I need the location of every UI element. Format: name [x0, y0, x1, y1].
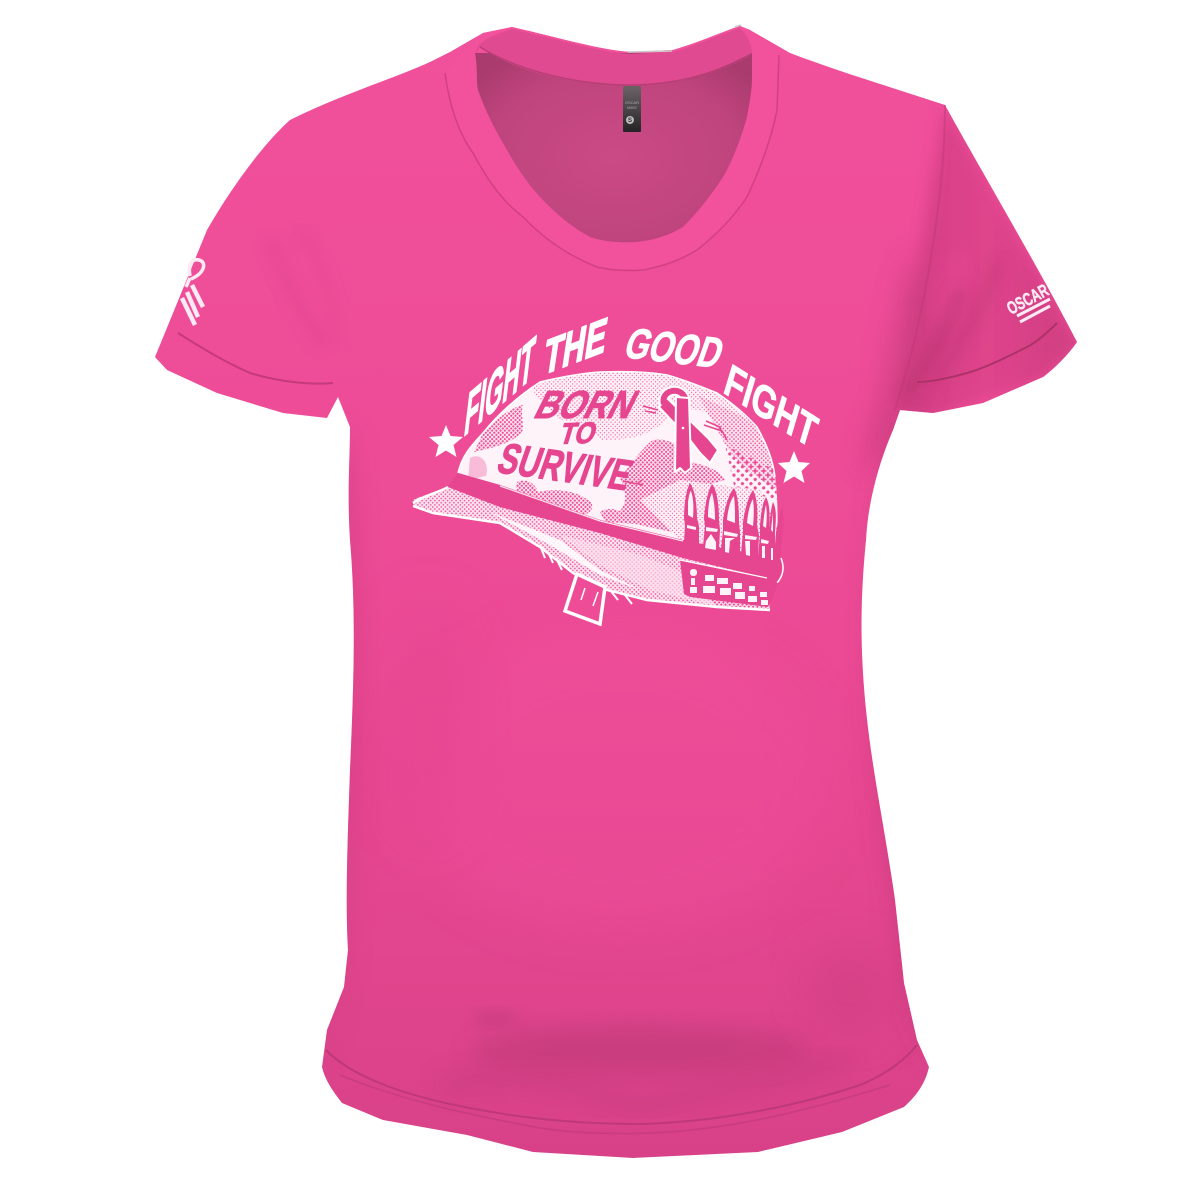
slogan: FIGHT THE GOOD FIGHT: THE — [540, 307, 611, 387]
fabric shading folds — [270, 105, 1080, 1105]
brim edge — [413, 487, 770, 610]
slogan: FIGHT THE GOOD FIGHT: FIGHT — [461, 324, 538, 451]
neck label tag: S — [628, 118, 632, 124]
bullets — [684, 483, 784, 562]
helmet scratches — [623, 406, 727, 485]
helmet band — [448, 473, 782, 583]
neck label tag: OSCAR — [625, 100, 639, 105]
product illustration: pink t-shirt — [155, 24, 1077, 1158]
left camo patches — [474, 405, 523, 452]
slogan: FIGHT THE GOOD FIGHT: GOOD — [619, 320, 730, 378]
pink ribbon — [659, 391, 718, 473]
neck label tag — [623, 86, 641, 132]
collar and neck opening — [445, 25, 779, 271]
collar seam — [445, 55, 779, 271]
top halftone camo — [534, 372, 749, 440]
collar rib — [445, 26, 779, 271]
helmet brim underside — [413, 487, 770, 609]
slogan: FIGHT THE GOOD FIGHT: FIGHT — [719, 355, 823, 458]
central camo patch — [620, 440, 725, 532]
right sleeve logo: OSCAR: OSCAR — [1004, 281, 1052, 319]
inner back neck — [475, 53, 752, 242]
helmet graffiti: BORN TO SURVIVE: TO — [556, 417, 601, 451]
left sleeve logo: ribbon with stripes — [182, 260, 204, 325]
t-shirt body — [155, 26, 1080, 1158]
lower camo patches — [516, 480, 592, 516]
chest graphic: helmet — [410, 307, 823, 624]
neck label tag: MIKE — [627, 105, 637, 110]
right halftone camo — [698, 395, 778, 490]
helmet graffiti: BORN TO SURVIVE: SURVIVE — [492, 436, 638, 500]
stars — [429, 425, 463, 457]
sleeve hems and seams — [178, 333, 333, 384]
chin strap buckle — [541, 548, 632, 624]
helmet dome — [458, 372, 778, 556]
ammo box — [680, 560, 778, 607]
slogan: FIGHT THE GOOD FIGHT — [461, 307, 823, 458]
helmet graffiti: BORN TO SURVIVE — [492, 384, 646, 500]
hem stitching — [326, 1045, 917, 1124]
helmet graffiti: BORN TO SURVIVE: BORN — [527, 384, 646, 427]
grey back edge — [628, 25, 741, 52]
back collar band — [475, 28, 752, 85]
helmet outline — [458, 372, 775, 477]
